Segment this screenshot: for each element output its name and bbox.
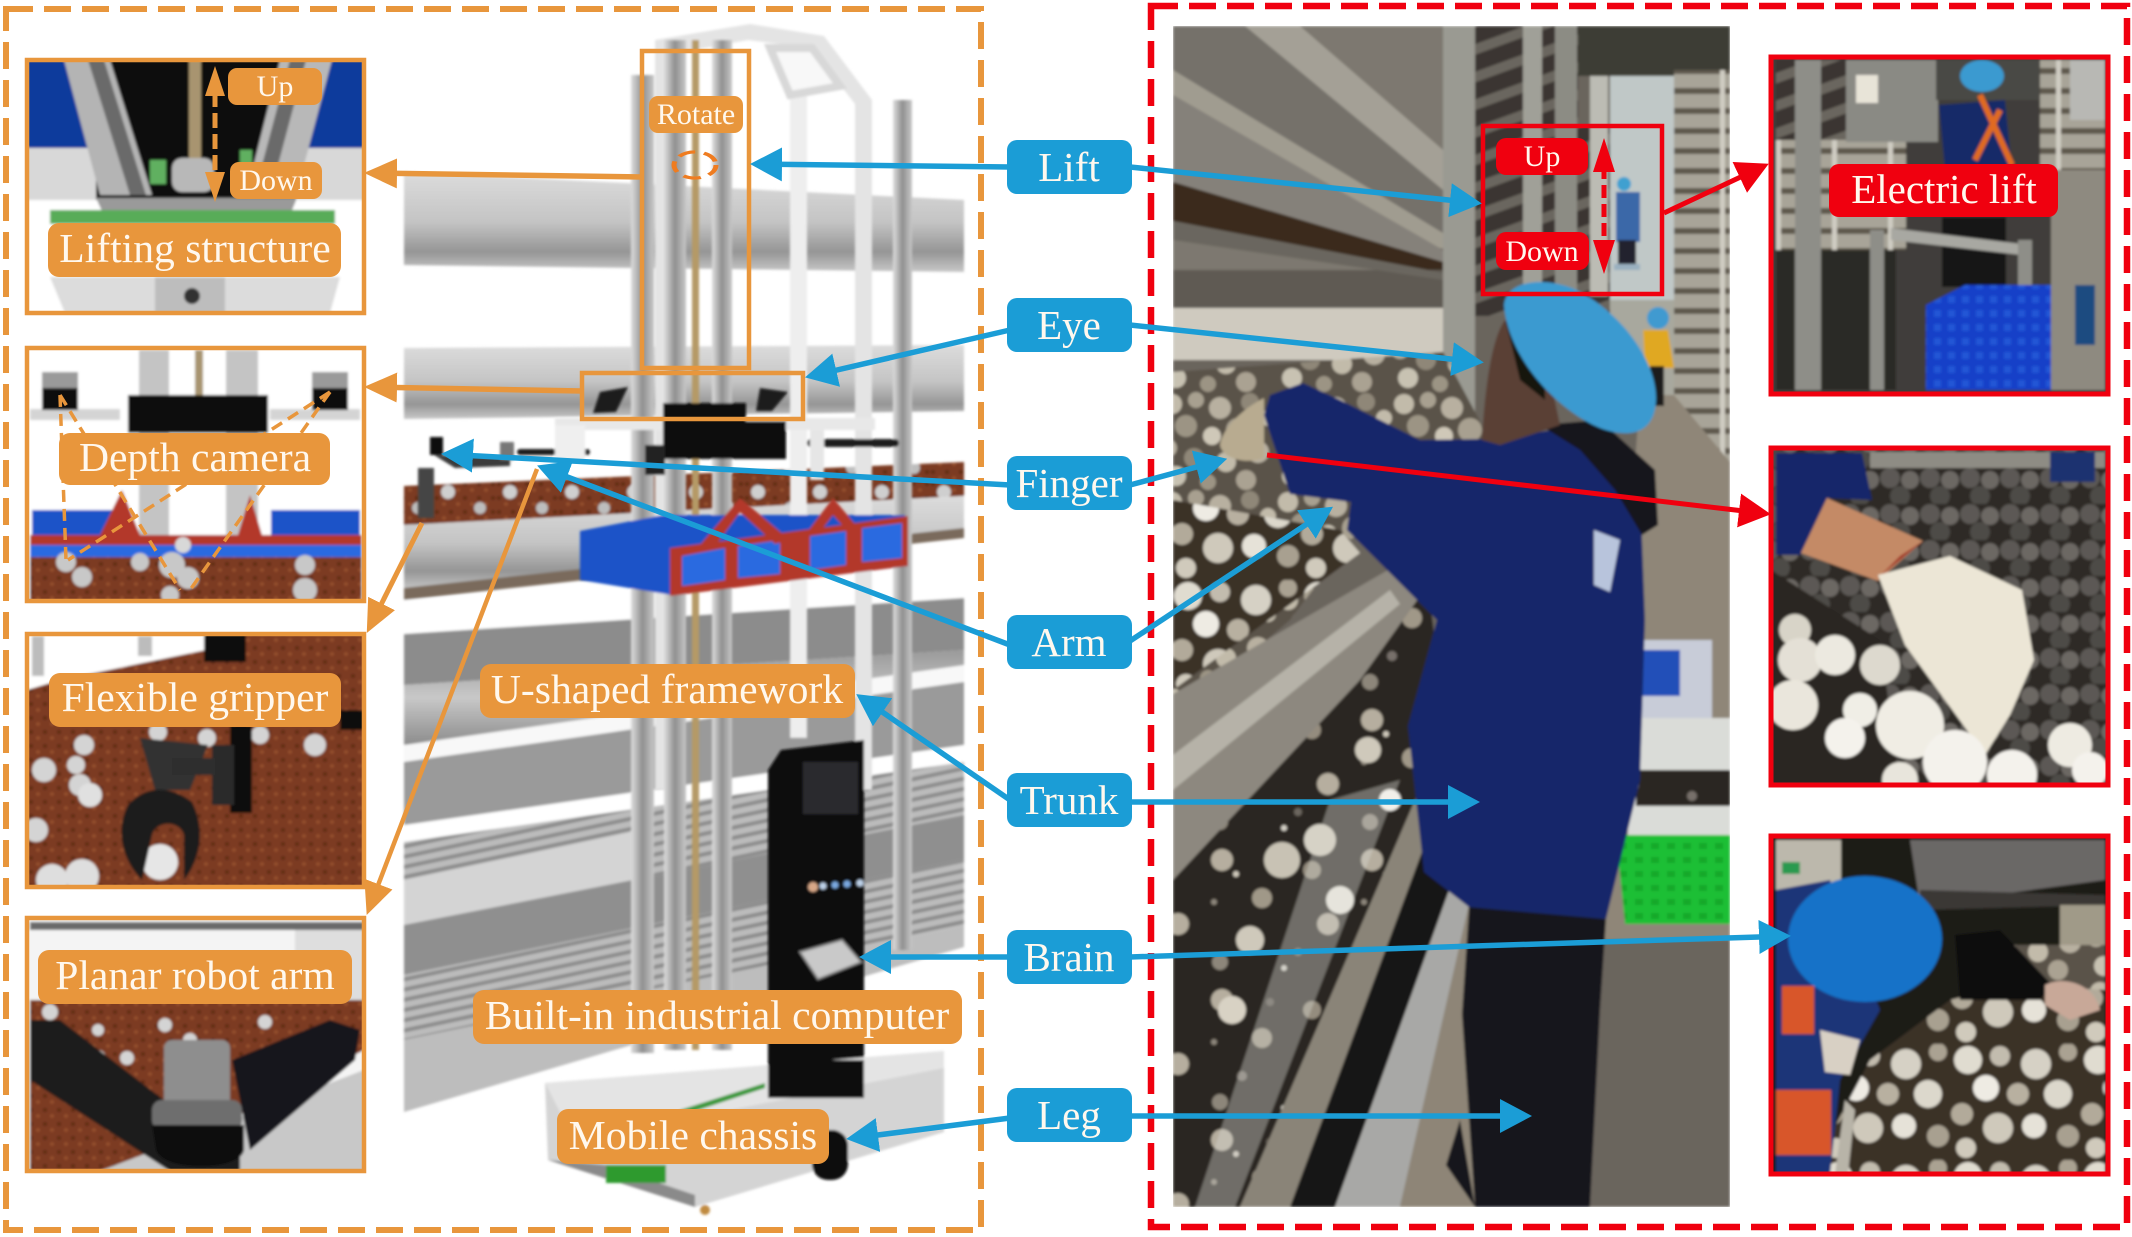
arrow: leg to worker legs — [1130, 1113, 1508, 1119]
label: Down: Down — [239, 164, 313, 197]
label: Built-in industrial computer: Built-in industrial computer — [485, 992, 949, 1038]
photo: jacket — [1264, 383, 1645, 919]
photo: upper shelves — [1173, 26, 1613, 360]
photo: hairnet — [1504, 282, 1656, 433]
arrow: brain to computer — [883, 954, 1010, 960]
panel: hand picking photo — [1768, 448, 2108, 800]
robot: control box — [555, 403, 875, 475]
highlight: electric lift box — [1483, 126, 1662, 294]
label: Flexible gripper: Flexible gripper — [62, 674, 329, 720]
photo: glove — [1220, 398, 1264, 461]
arrow: lift to electric lift — [1130, 167, 1458, 201]
label: Trunk: Trunk — [1020, 777, 1119, 823]
arrow: finger to gripper — [465, 455, 1010, 485]
photo: crates — [1616, 640, 1730, 924]
photo: worker picking mushrooms — [1173, 26, 1730, 1207]
arrow: trunk to framework — [876, 708, 1010, 800]
dashed red up/down arrow — [1593, 138, 1615, 274]
arrow: brain to head — [1130, 937, 1767, 957]
label: Lift: Lift — [1038, 144, 1100, 190]
robot: mobile chassis — [545, 1051, 944, 1215]
illustration: growing shelves — [404, 172, 964, 1112]
robot: U-shaped frame — [655, 24, 872, 790]
arrow: depth camera zoom — [389, 387, 582, 391]
arrow: arm to worker arm — [1130, 520, 1313, 641]
robot: tower and display — [768, 740, 864, 1098]
highlight: lifting column box — [642, 51, 749, 368]
photo: upper mushroom bed — [1173, 352, 1490, 720]
label: Down red: Down — [1505, 235, 1579, 268]
panel: robot dashed frame — [6, 9, 981, 1230]
arrow: eye to worker — [1130, 325, 1460, 360]
label: Lifting structure: Lifting structure — [59, 225, 331, 271]
label: Mobile chassis: Mobile chassis — [569, 1112, 817, 1158]
arrow: planar arm zoom — [376, 469, 537, 892]
label: Brain: Brain — [1023, 934, 1115, 980]
arrow: lifting structure zoom — [389, 173, 642, 177]
label: Up — [228, 68, 322, 105]
label: Trunk — [1007, 773, 1132, 827]
frame — [1771, 448, 2108, 785]
arrow: leg to chassis — [870, 1118, 1010, 1136]
arrow: eye to cameras — [828, 330, 1010, 372]
frame — [1771, 57, 2108, 394]
dashed sensing lines — [60, 392, 330, 590]
label: U-shaped framework: U-shaped framework — [491, 666, 843, 712]
frame — [27, 60, 364, 313]
dashed up/down arrow — [205, 66, 225, 202]
label: Leg: Leg — [1037, 1092, 1101, 1138]
panel: flexible gripper — [24, 634, 364, 896]
photo: distant workers — [1614, 177, 1674, 406]
label: Eye — [1007, 298, 1132, 352]
frame — [1771, 836, 2108, 1174]
panel: planar robot arm — [27, 918, 364, 1171]
highlight: camera box — [582, 373, 803, 419]
label: Finger: Finger — [1015, 460, 1123, 506]
arrow: hand zoom — [1267, 455, 1747, 511]
label: Leg — [1007, 1088, 1132, 1142]
label: Down red — [1496, 232, 1589, 270]
label: Rotate: Rotate — [657, 98, 735, 131]
panel: lifting structure — [27, 60, 364, 313]
label: Arm: Arm — [1031, 619, 1107, 665]
arrow: finger to hand — [1130, 465, 1204, 485]
label: Up red: Up — [1524, 140, 1560, 173]
frame — [27, 634, 364, 887]
robot: collection bin — [580, 498, 908, 596]
photo: floor rails — [1240, 790, 1480, 1207]
robot: planar arm and gripper — [418, 425, 899, 518]
arrow: flexible gripper zoom — [378, 523, 422, 611]
illustration: harvesting robot — [418, 24, 944, 1215]
label: Planar robot arm: Planar robot arm — [55, 952, 335, 998]
panel: human dashed frame — [1151, 6, 2127, 1227]
arrow: arm to planar arm — [560, 474, 1010, 645]
photo: tray rail — [1173, 570, 1418, 880]
photo: jacket lettering — [1594, 530, 1620, 592]
label: Electric lift: Electric lift — [1851, 166, 2037, 212]
frame — [27, 918, 364, 1171]
panel: reaching worker photo — [1771, 836, 2108, 1174]
label: Eye: Eye — [1037, 302, 1101, 348]
frame — [27, 348, 364, 601]
panel: electric lift photo — [1771, 57, 2108, 394]
arrow: lift to column — [774, 164, 1010, 167]
label: Depth camera: Depth camera — [79, 434, 311, 480]
photo: pants — [1462, 907, 1606, 1207]
label: Brain — [1007, 930, 1132, 984]
label: Lift — [1007, 140, 1132, 194]
photo: face and hair — [1482, 320, 1560, 445]
photo: hood — [1540, 420, 1658, 535]
arrow: trunk to worker body — [1130, 799, 1456, 805]
label: Arm — [1007, 615, 1132, 669]
photo: corridor and far racks — [1443, 26, 1730, 940]
panel: depth camera — [27, 348, 364, 604]
robot: industrial computer — [800, 940, 861, 979]
photo: lower mushroom bed — [1173, 585, 1445, 1207]
icon: rotate dashed circle — [674, 152, 716, 178]
arrow: electric lift zoom — [1664, 174, 1747, 213]
label: Up red — [1496, 138, 1588, 175]
robot: lifting columns — [631, 40, 912, 1053]
label: Up: Up — [257, 70, 293, 103]
robot: depth cameras — [593, 387, 788, 413]
